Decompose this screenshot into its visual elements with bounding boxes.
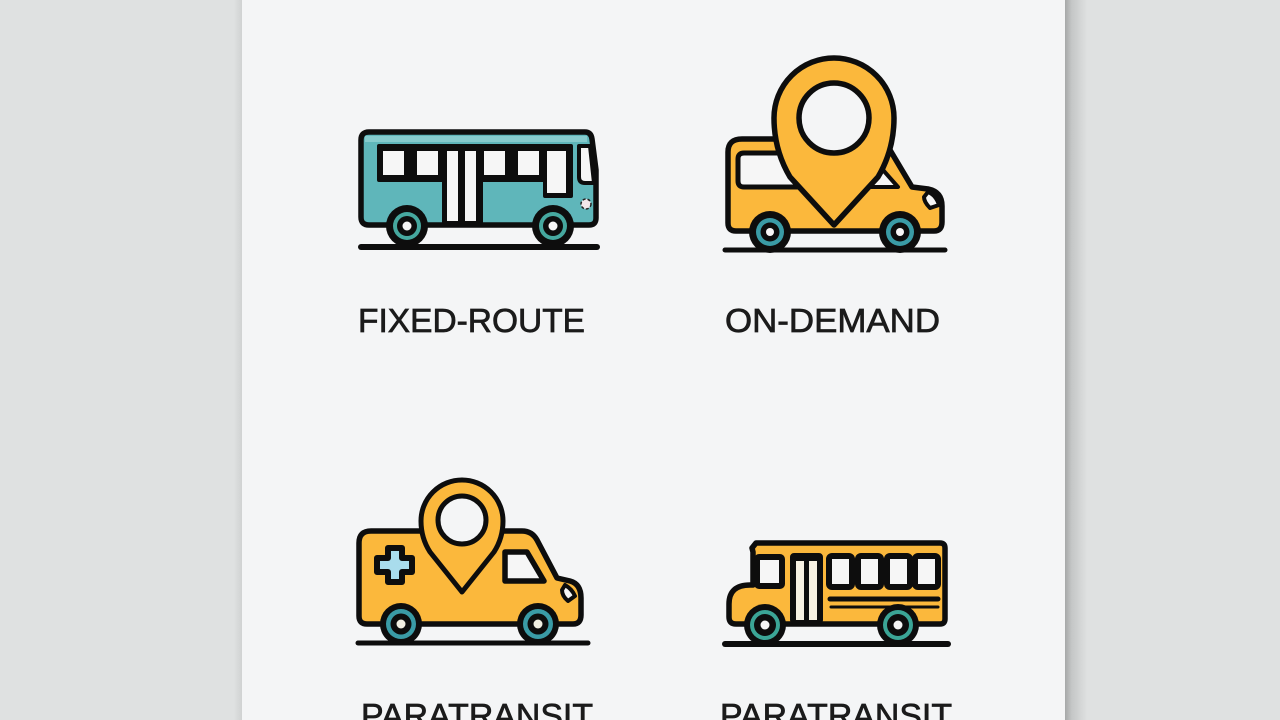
label: on-demand: ON-DEMAND — [725, 302, 940, 339]
icon: location pin — [421, 480, 503, 592]
label: fixed-route: FIXED-ROUTE — [358, 302, 585, 339]
icon: on-demand van with pin — [725, 58, 945, 253]
icon: paratransit van with cross and pin — [358, 480, 588, 645]
icon: fixed-route bus — [361, 132, 597, 247]
panel: paper sheet — [242, 0, 1065, 720]
icon: school bus — [725, 543, 948, 646]
icon: location pin — [774, 58, 894, 225]
panel shadow — [234, 0, 1087, 720]
